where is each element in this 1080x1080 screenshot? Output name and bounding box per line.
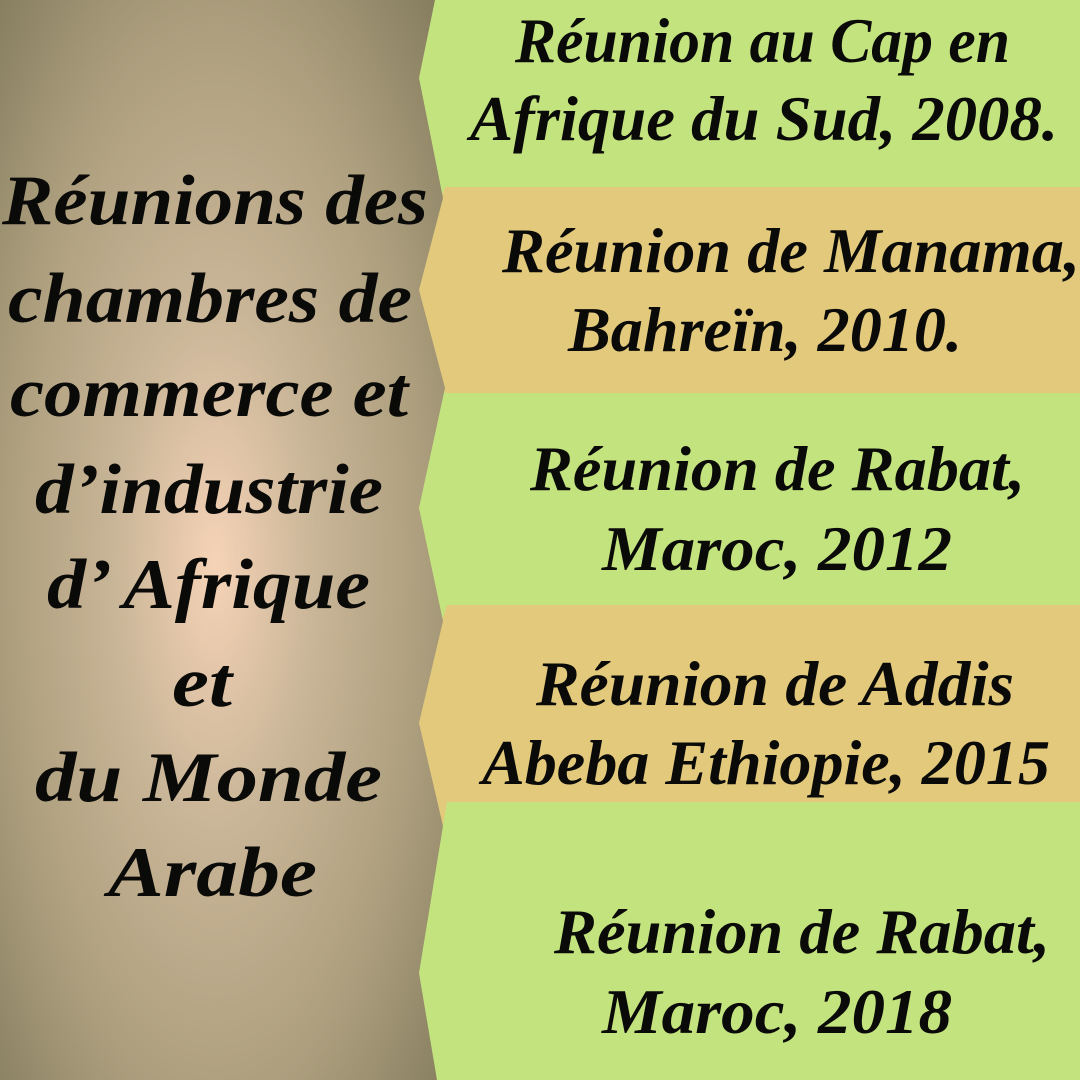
title: Réunions des [1,162,428,240]
text block: Manama 2010: Bahreïn, 2010. [567,294,962,365]
text block: Rabat 2018: Maroc, 2018 [601,976,952,1047]
text block: Rabat 2018: Réunion de Rabat, [553,896,1050,967]
text block: Cap 2008: Réunion au Cap en [514,5,1010,76]
title: et [172,644,235,722]
panel: tan band Manama [410,187,1080,393]
text block: Rabat 2018 [553,896,1050,1047]
title: commerce et [10,354,410,432]
text block: Rabat 2012: Réunion de Rabat, [529,433,1025,504]
text block: Rabat 2012 [529,433,1025,584]
panel: green band background [400,0,1080,1080]
text block: Cap 2008 [466,5,1058,154]
title [1,162,428,912]
text block: Manama 2010 [501,215,1080,365]
title: du Monde [35,739,382,817]
panel: tan band Addis Abeba [410,605,1080,826]
title: d’industrie [35,451,383,529]
text block: Cap 2008: Afrique du Sud, 2008. [466,83,1058,154]
text block: Manama 2010: Réunion de Manama, [501,215,1080,286]
text block: Rabat 2012: Maroc, 2012 [601,513,952,584]
panel: left title column [0,0,445,1080]
title: d’ Afrique [47,546,370,624]
text block: Addis Abeba 2015: Réunion de Addis [535,648,1014,719]
title: chambres de [8,260,412,338]
text block: Addis Abeba 2015 [478,648,1050,798]
text block: Addis Abeba 2015: Abeba Ethiopie, 2015 [478,727,1050,798]
title: Arabe [103,834,317,912]
